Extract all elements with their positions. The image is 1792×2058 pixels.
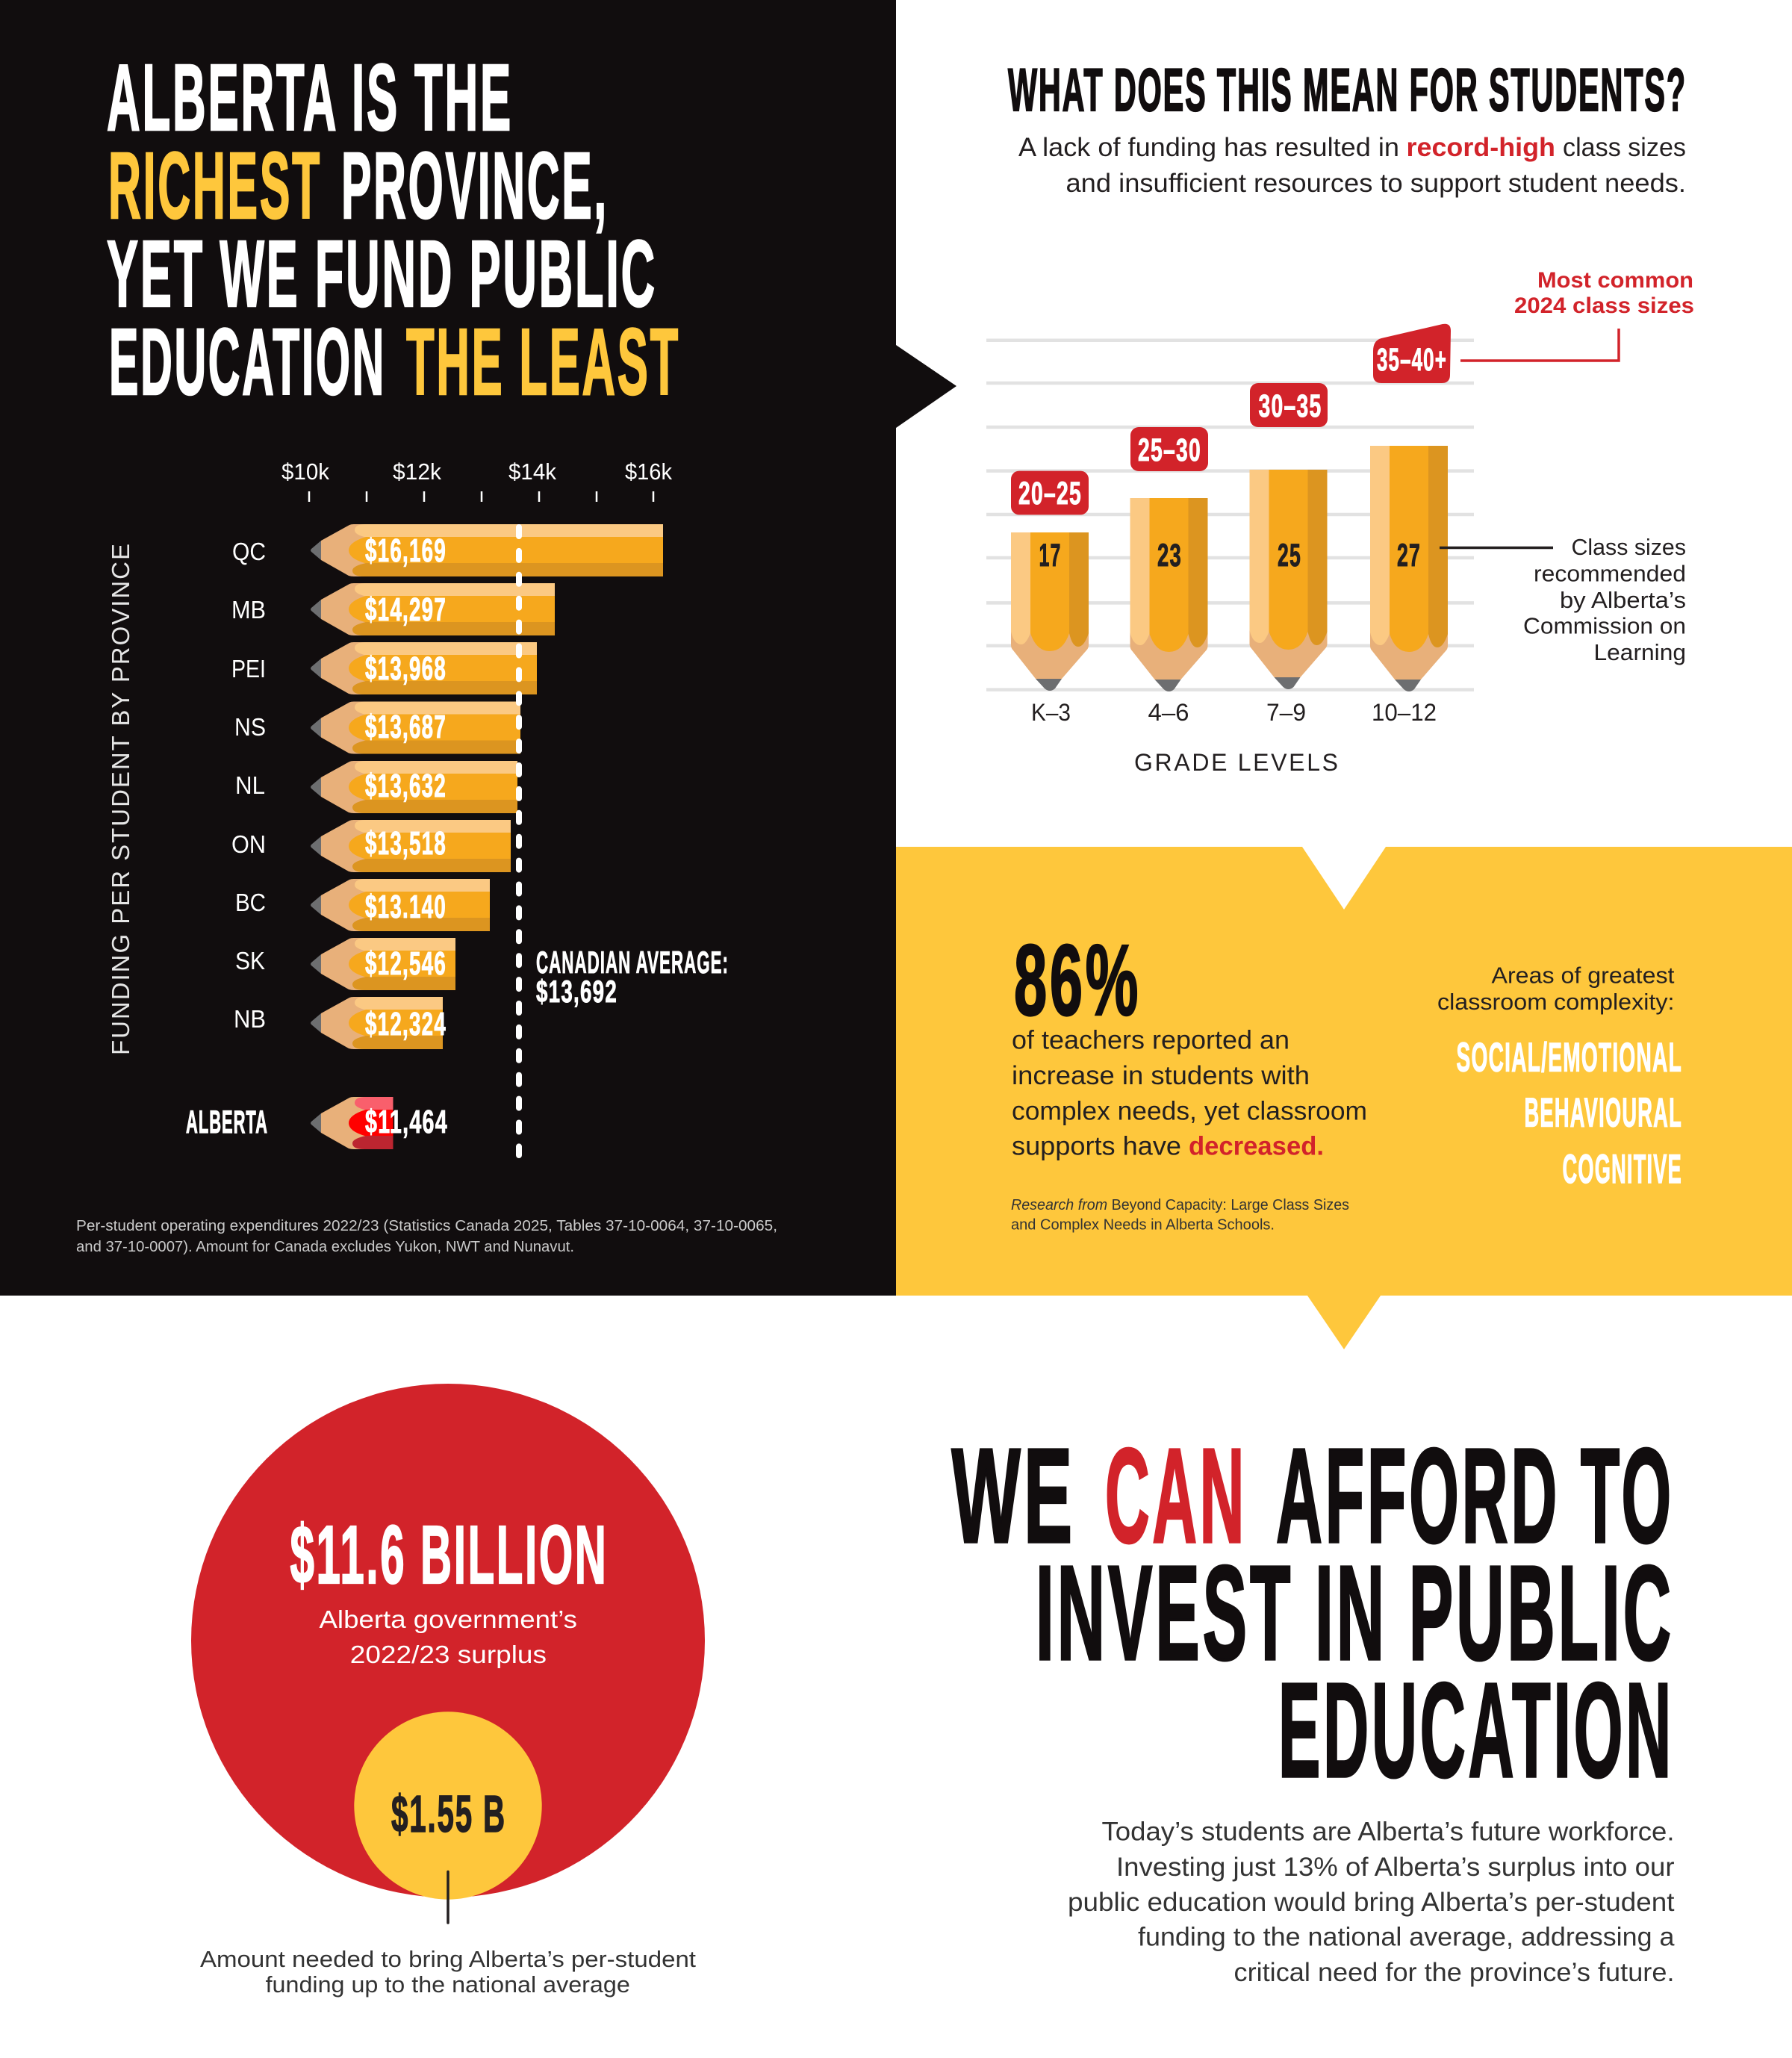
bar values: $12,546 (365, 945, 447, 982)
axis: dollar scale and ticks: $10k (281, 458, 329, 485)
callout: recommended class sizes: Commission on (1523, 613, 1686, 639)
text: areas of complexity: classroom complexity: (1437, 989, 1674, 1015)
bar values: $14,297 (365, 591, 447, 628)
badge: 30-35 (1250, 383, 1328, 427)
axis: dollar scale and ticks (281, 458, 672, 502)
bar values: $13,687 (365, 709, 447, 745)
bar values (365, 532, 448, 1140)
panel: surplus circles (191, 1384, 705, 1998)
recommended class size numbers (1039, 538, 1421, 573)
panel: what this means for students (986, 57, 1694, 776)
line: Canadian average (516, 527, 522, 1155)
badge: 25-30: 25–30 (1138, 432, 1201, 468)
badge: 35-40+ (1373, 324, 1451, 383)
badge: 25-30 (1130, 427, 1208, 471)
label: Alberta: ALBERTA (186, 1104, 268, 1140)
pencil bar: Alberta (311, 1097, 393, 1149)
body text: invest in workforce: Today’s students are Alberta’s future workforce. (1102, 1818, 1674, 1847)
bar values: $16,169 (365, 532, 447, 569)
axis title: funding per student by province: FUNDING PER STUDENT BY PROVINCE (107, 544, 134, 1055)
callout: recommended class sizes: Class sizes (1571, 534, 1686, 560)
intro text: class sizes (1563, 133, 1686, 162)
callout: most common 2024 class sizes (1460, 268, 1694, 361)
text: teachers reported: of teachers reported an (1012, 1026, 1289, 1054)
title: Alberta is the richest province: PROVINCE, (341, 133, 609, 238)
grade labels: K–3 (1031, 699, 1071, 726)
recommended class size numbers: 17 (1039, 538, 1062, 573)
pencil bar: NB (311, 997, 443, 1049)
grade labels: 7–9 (1266, 699, 1306, 726)
recommended class size numbers: 25 (1278, 538, 1301, 573)
bar values: $11,464 (365, 1104, 448, 1140)
text: teachers reported: decreased. (1189, 1132, 1324, 1160)
title: Alberta is the richest province: EDUCATION (109, 309, 386, 414)
badge: 20-25 (1011, 471, 1089, 514)
grade labels (1031, 699, 1437, 726)
bar values: $13.140 (365, 889, 447, 925)
text: teachers reported: increase in students with (1012, 1061, 1310, 1090)
callout: recommended class sizes: recommended (1534, 560, 1686, 587)
pencil: 7-9 (1250, 470, 1328, 689)
pencil bar: NL (311, 761, 517, 813)
text: government surplus: 2022/23 surplus (350, 1641, 547, 1668)
pencil bar: MB (311, 583, 555, 635)
callout: recommended class sizes (1440, 534, 1686, 665)
axis: dollar scale and ticks: $14k (508, 458, 556, 485)
body text: invest in workforce (1068, 1818, 1675, 1987)
panel: funding per student by province (0, 0, 956, 1296)
province labels: NS (234, 713, 266, 741)
pointer line (447, 1871, 449, 1923)
citation: beyond capacity research: and Complex Needs in Alberta Schools. (1011, 1217, 1275, 1234)
recommended class size numbers: 23 (1157, 538, 1182, 573)
bar values: $13,632 (365, 768, 447, 804)
body text: invest in workforce: Investing just 13% of Alberta’s surplus into our (1116, 1853, 1675, 1882)
province labels: NL (235, 771, 265, 799)
intro text (1018, 133, 1686, 198)
bar values: $13,968 (365, 650, 447, 687)
panel: teachers and classroom complexity (896, 847, 1792, 1349)
callout: Canadian average value: $13,692 (536, 974, 617, 1009)
grade labels: 4–6 (1148, 699, 1189, 726)
heading: we can afford to invest in public education: CAN (1105, 1421, 1247, 1571)
panel: we can afford to invest (951, 1421, 1675, 1987)
citation: beyond capacity research (1011, 1197, 1349, 1234)
axis: dollar scale and ticks: $12k (393, 458, 441, 485)
callout: recommended class sizes: by Alberta’s (1560, 587, 1686, 613)
statistic: 86%: 86% (1014, 924, 1141, 1036)
callout: Canadian average value: CANADIAN AVERAGE: (536, 945, 729, 980)
province labels: MB (231, 596, 266, 624)
text: government surplus: Alberta government’s (320, 1605, 577, 1633)
footnote: data sources: and 37-10-0007). Amount for Canada excludes Yukon, NWT and Nunavut. (76, 1239, 574, 1255)
callout: recommended class sizes: Learning (1593, 639, 1686, 665)
body text: invest in workforce: public education would bring Alberta’s per-student (1068, 1888, 1675, 1917)
pencil bar: BC (311, 879, 490, 931)
province labels (231, 538, 266, 1033)
province labels: SK (235, 947, 265, 974)
text: areas of complexity: Areas of greatest (1492, 962, 1675, 989)
pencil: 4-6 (1130, 498, 1208, 691)
text: teachers reported: supports have (1012, 1132, 1181, 1160)
heading: we can afford to invest in public education (951, 1421, 1674, 1806)
province labels: ON (231, 830, 266, 858)
text: amount needed caption: Amount needed to bring Alberta’s per-student (200, 1946, 696, 1972)
text: teachers reported (1012, 1026, 1367, 1160)
pencil bar: NS (311, 702, 520, 754)
pencil: K-3 (1011, 532, 1089, 691)
circle: surplus (191, 1384, 705, 1897)
title: Alberta is the richest province: ALBERTA IS THE (107, 45, 513, 150)
title: Alberta is the richest province: RICHEST (108, 133, 322, 238)
axis: dollar scale and ticks: $16k (625, 458, 672, 485)
citation: beyond capacity research: Research from Beyond Capacity: Large Class Sizes (1011, 1197, 1349, 1213)
text: areas of complexity (1437, 962, 1675, 1015)
callout: most common 2024 class sizes: Most common (1537, 268, 1693, 293)
callout: Canadian average value (536, 945, 729, 1009)
pencil bar: PEI (311, 642, 537, 694)
province labels: QC (232, 538, 266, 565)
list: complexity areas (1456, 1033, 1682, 1192)
title: Alberta is the richest province: YET WE FUND PUBLIC (107, 221, 657, 326)
title: Alberta is the richest province (107, 45, 680, 414)
value: 11.6 billion: $11.6 BILLION (290, 1509, 608, 1601)
body text: invest in workforce: critical need for the province’s future. (1233, 1958, 1674, 1987)
province labels: PEI (231, 655, 266, 683)
callout: most common 2024 class sizes: 2024 class sizes (1514, 293, 1694, 318)
pencil: 10-12 (1370, 446, 1448, 691)
intro text: record-high (1407, 133, 1555, 162)
intro text: and insufficient resources to support student needs. (1066, 169, 1686, 198)
badge: 30-35: 30–35 (1259, 388, 1322, 424)
text: government surplus (320, 1605, 577, 1668)
badge: 20-25: 20–25 (1018, 476, 1082, 512)
text: teachers reported: complex needs, yet classroom (1012, 1096, 1367, 1126)
badge: 35-40+: 35–40+ (1377, 342, 1447, 378)
recommended class size numbers: 27 (1397, 538, 1421, 573)
circle: amount needed (354, 1712, 542, 1900)
value: 1.55 B: $1.55 B (391, 1785, 506, 1843)
footnote: data sources (76, 1218, 777, 1255)
axis title: grade levels: GRADE LEVELS (1134, 749, 1338, 776)
grade labels: 10–12 (1372, 699, 1437, 726)
text: amount needed caption: funding up to the national average (266, 1971, 630, 1998)
province labels: BC (235, 889, 266, 916)
bar values: $12,324 (365, 1006, 447, 1042)
pencil bar: QC (311, 524, 663, 576)
heading: we can afford to invest in public education: WE (951, 1421, 1075, 1571)
province labels: NB (234, 1005, 266, 1033)
body text: invest in workforce: funding to the national average, addressing a (1138, 1922, 1675, 1952)
chart: class sizes by grade level (986, 324, 1474, 776)
pencil bar: SK (311, 938, 455, 990)
pencil bar: ON (311, 820, 511, 872)
footnote: data sources: Per-student operating expenditures 2022/23 (Statistics Canada 2025, Tables 37-10-0064, 37-10-0065, (76, 1218, 777, 1234)
intro text: A lack of funding has resulted in (1018, 133, 1399, 162)
panel: funding per student by province: THE LEAST (406, 309, 680, 414)
bar values: $13,518 (365, 825, 447, 862)
text: amount needed caption (200, 1946, 696, 1998)
